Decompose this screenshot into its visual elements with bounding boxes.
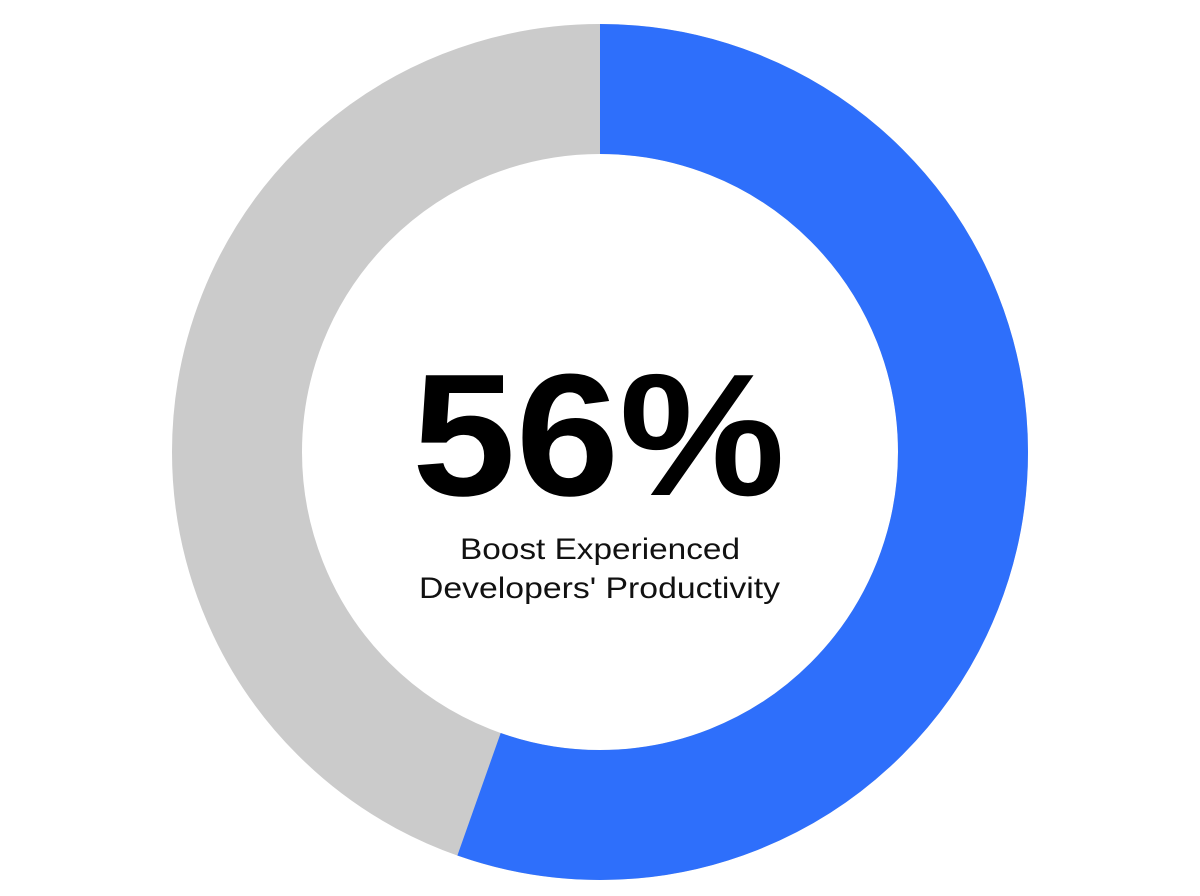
- center value: 56%: [412, 337, 785, 532]
- center label: [419, 533, 780, 605]
- ring: 56% segment (blue): [237, 89, 963, 815]
- center label: Developers' Productivity: [419, 572, 780, 605]
- ring: remaining (grey): [237, 89, 963, 815]
- center label: Boost Experienced: [460, 533, 740, 566]
